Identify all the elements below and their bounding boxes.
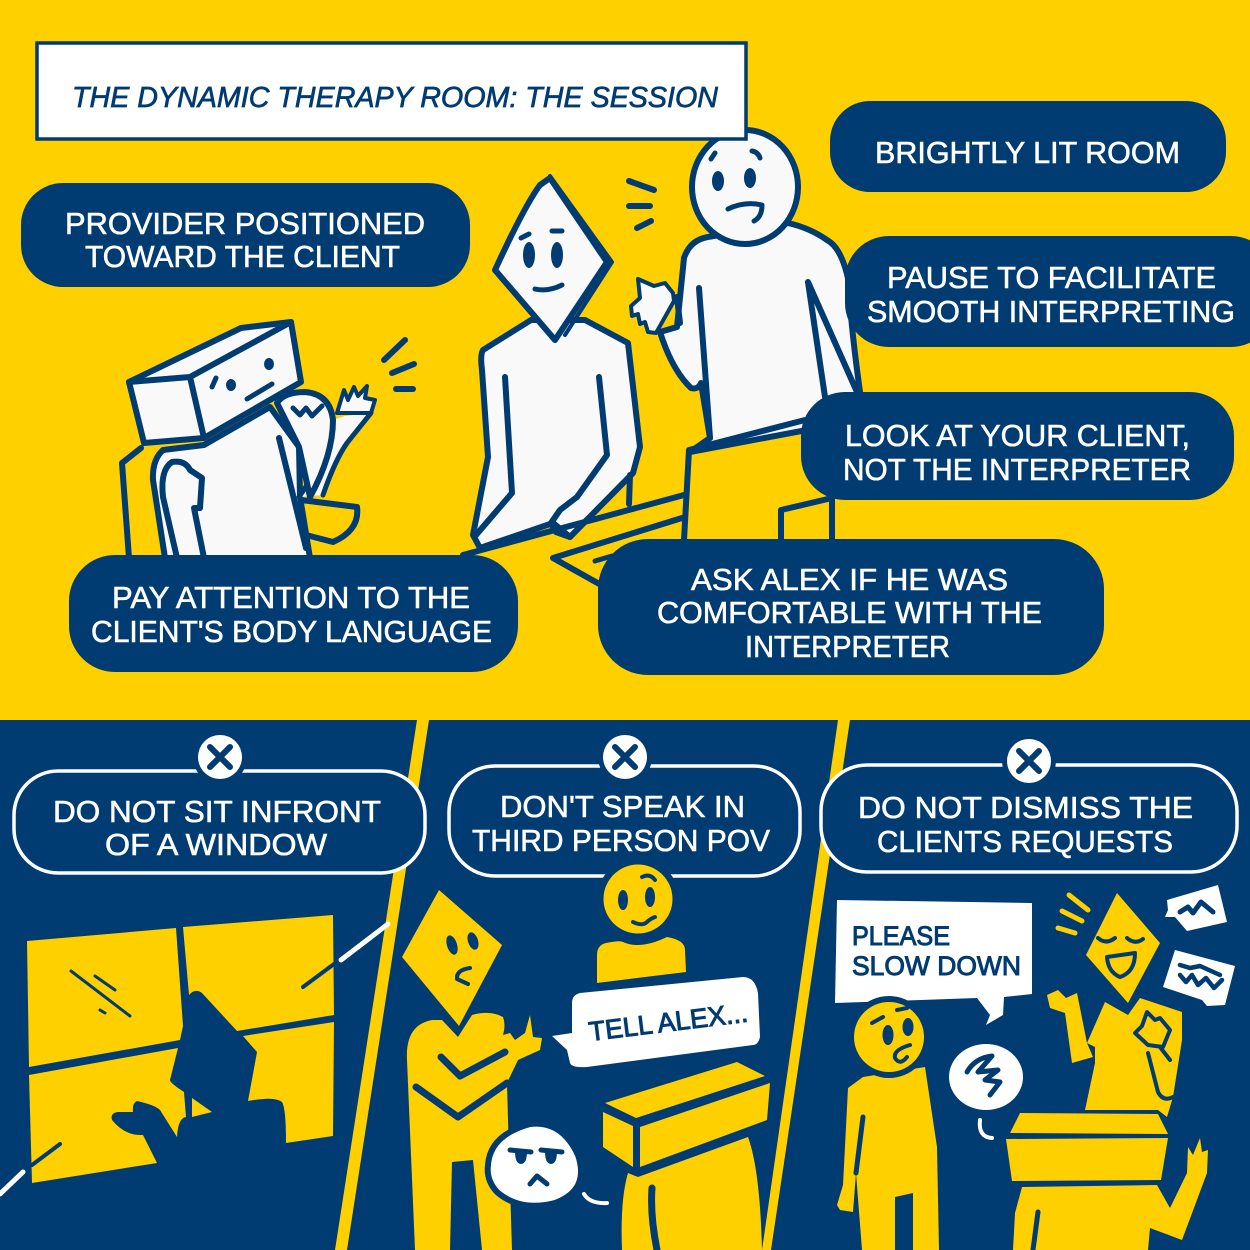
head: box	[129, 322, 301, 443]
callout: brightly lit room	[830, 101, 1226, 192]
callout: body language: CLIENT'S BODY LANGUAGE	[91, 614, 492, 649]
heading: third person rule	[449, 766, 800, 876]
marks: emphasis lines	[629, 181, 654, 228]
figure: client with box head	[1006, 1113, 1208, 1250]
figure: provider with diamond head	[402, 890, 542, 1250]
speech bubble: please slow down: SLOW DOWN	[852, 951, 1021, 981]
heading: dismiss rule	[821, 765, 1237, 872]
callout: provider position: TOWARD THE CLIENT	[85, 239, 400, 274]
head: diamond	[495, 178, 607, 340]
callout: look at client: NOT THE INTERPRETER	[843, 452, 1191, 487]
speech bubbles: scribbles	[1163, 885, 1235, 1006]
figure: interpreter	[597, 858, 686, 983]
speech bubble: please slow down: PLEASE	[852, 921, 950, 951]
callout: ask alex: ASK ALEX IF HE WAS	[691, 562, 1008, 597]
icon: x mark	[598, 730, 652, 784]
callout: look at client	[801, 392, 1234, 500]
callout: ask alex: INTERPRETER	[745, 629, 950, 664]
icon: x mark	[193, 730, 247, 784]
callout: pause	[845, 236, 1250, 347]
figure: provider with diamond head	[473, 176, 640, 548]
window with silhouette	[0, 915, 388, 1194]
head: round face	[692, 130, 798, 244]
figure: client with box head	[603, 1062, 770, 1250]
speech bubble: please slow down	[835, 900, 1032, 1025]
callout: ask alex	[598, 539, 1104, 675]
heading: dismiss rule: DO NOT DISMISS THE	[858, 790, 1193, 825]
speech bubble: tell alex	[552, 977, 760, 1067]
figure: interpreter	[837, 996, 939, 1250]
laptop and table	[463, 420, 832, 590]
icon: open hand	[631, 279, 674, 333]
panel: don't speak in third person	[402, 730, 800, 1250]
heading: third person rule: DON'T SPEAK IN	[500, 789, 745, 824]
panel: do not sit in front of a window	[0, 730, 425, 1194]
callout: body language	[69, 555, 518, 672]
panel: navy background with dividers	[0, 720, 1250, 1250]
callout: body language: PAY ATTENTION TO THE	[112, 580, 470, 615]
callout: ask alex: COMFORTABLE WITH THE	[657, 595, 1042, 630]
callout: provider position	[21, 183, 470, 287]
title: THE DYNAMIC THERAPY ROOM: THE SESSION	[72, 82, 718, 114]
panel: do not dismiss requests	[821, 734, 1237, 1250]
icon: x mark	[1002, 734, 1056, 788]
heading: window rule	[14, 771, 425, 873]
heading: dismiss rule: CLIENTS REQUESTS	[877, 824, 1173, 859]
figure: provider with diamond head	[1047, 893, 1182, 1117]
figure: client with box head	[122, 322, 375, 558]
speech bubble: tell alex: TELL ALEX...	[587, 998, 750, 1047]
callout: look at client: LOOK AT YOUR CLIENT,	[845, 418, 1190, 453]
callout: pause: PAUSE TO FACILITATE	[887, 260, 1216, 295]
figure: standing interpreter	[631, 130, 860, 452]
marks: client emphasis lines	[384, 340, 414, 389]
arm: raised hand	[299, 413, 371, 497]
heading: window rule: DO NOT SIT INFRONT	[53, 794, 381, 829]
callout: brightly lit room: BRIGHTLY LIT ROOM	[875, 135, 1180, 170]
heading: third person rule: THIRD PERSON POV	[472, 823, 770, 858]
heading: window rule: OF A WINDOW	[105, 827, 328, 862]
thought blob: scribble	[949, 1044, 1023, 1138]
title	[37, 43, 746, 139]
callout: provider position: PROVIDER POSITIONED	[65, 206, 425, 241]
head: frowning face	[488, 1124, 607, 1206]
callout: pause: SMOOTH INTERPRETING	[867, 294, 1235, 329]
panel: session scene	[122, 130, 860, 590]
